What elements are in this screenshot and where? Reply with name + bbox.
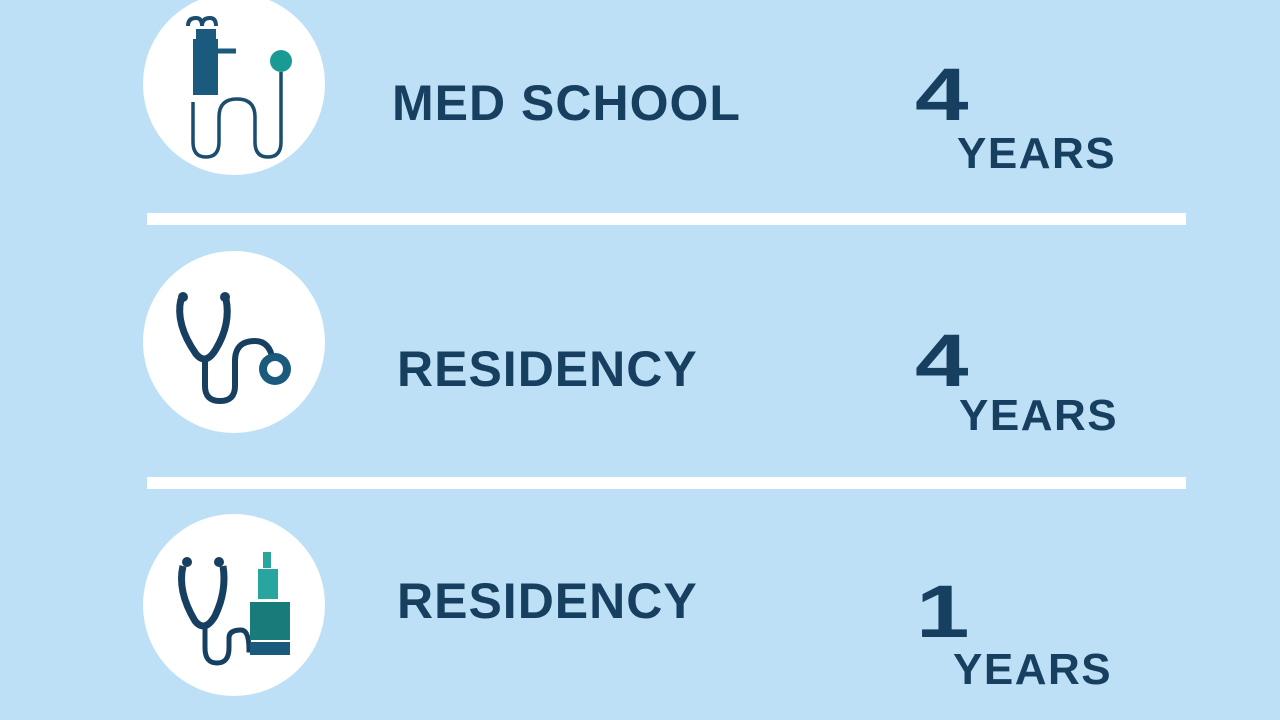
number: 4: 4 [915, 319, 969, 402]
years: YEARS [953, 645, 1112, 694]
years: YEARS [957, 129, 1116, 178]
years: YEARS [959, 391, 1118, 440]
label: med school: MED SCHOOL [392, 75, 741, 131]
label: residency: RESIDENCY [397, 341, 698, 397]
number: 1: 1 [916, 570, 970, 653]
icon: stethoscope with device [143, 514, 325, 696]
divider [147, 477, 1186, 489]
number: 4: 4 [915, 53, 969, 136]
icon: med school [143, 0, 325, 175]
divider [147, 213, 1186, 225]
label: residency: RESIDENCY [397, 573, 698, 629]
icon: stethoscope [143, 251, 325, 433]
